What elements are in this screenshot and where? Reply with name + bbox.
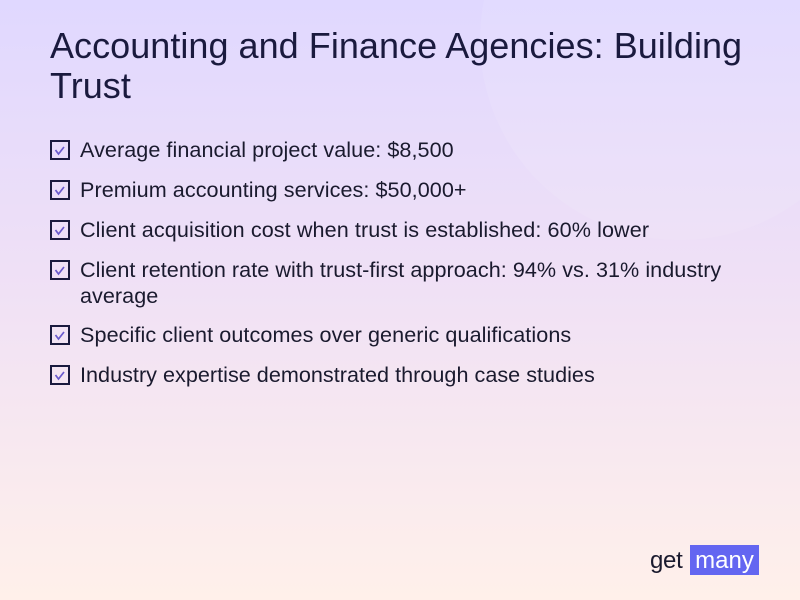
decorative circle <box>480 0 800 240</box>
item: average project value: Average financial project value: $8,500 <box>80 137 454 162</box>
logo: get <box>650 547 682 574</box>
item: industry expertise: Industry expertise demonstrated through case studies <box>80 362 595 387</box>
logo: many <box>695 547 754 574</box>
item: acquisition cost: Client acquisition cost when trust is established: 60% lower <box>80 217 649 242</box>
title: Accounting and Finance Agencies: Building Trust <box>50 25 742 106</box>
logo <box>650 545 759 575</box>
checklist <box>50 137 722 387</box>
item: client outcomes: Specific client outcomes over generic qualifications <box>80 322 571 347</box>
item: premium services: Premium accounting services: $50,000+ <box>80 177 467 202</box>
item: retention rate: Client retention rate with trust-first approach: 94% vs. 31% industry average <box>80 257 721 308</box>
